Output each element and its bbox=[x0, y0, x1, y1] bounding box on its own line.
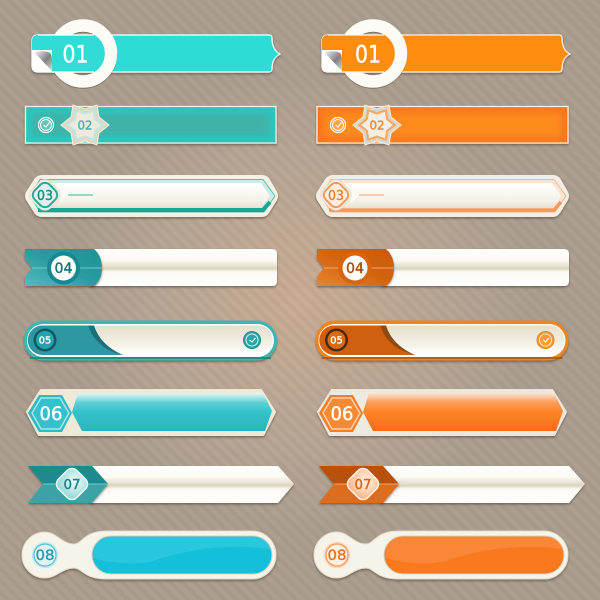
hexagon badge bbox=[319, 395, 363, 432]
icon: clock bbox=[330, 118, 346, 132]
hexagon badge bbox=[28, 395, 72, 432]
number 04: 04 bbox=[346, 261, 364, 277]
panel: teal banner 03 bbox=[25, 175, 278, 217]
panel: orange banner 05 bbox=[316, 320, 568, 360]
star badge bbox=[61, 105, 109, 145]
number 06: 06 bbox=[40, 403, 62, 425]
panel: teal banner 08 bbox=[22, 531, 276, 579]
number 06: 06 bbox=[330, 403, 354, 425]
panel: teal banner 07 bbox=[28, 466, 294, 503]
number 01: 01 bbox=[62, 40, 88, 68]
diamond badge bbox=[27, 177, 63, 213]
diamond badge bbox=[54, 466, 90, 502]
number 03: 03 bbox=[37, 189, 53, 204]
number 04: 04 bbox=[54, 261, 73, 277]
number badge bbox=[32, 542, 58, 568]
number 05: 05 bbox=[39, 336, 51, 346]
panel: orange banner 07 bbox=[319, 466, 585, 503]
panel: teal banner 04 bbox=[25, 249, 277, 286]
number 08: 08 bbox=[328, 548, 346, 564]
number 07: 07 bbox=[354, 478, 372, 493]
panel: teal banner 01 bbox=[32, 26, 280, 82]
number 02: 02 bbox=[78, 118, 92, 132]
diamond badge bbox=[318, 177, 354, 213]
panel: orange banner 08 bbox=[314, 531, 568, 579]
star badge bbox=[353, 105, 401, 145]
number 02: 02 bbox=[370, 118, 384, 132]
panel: orange banner 03 bbox=[316, 175, 569, 217]
icon: clock bbox=[244, 332, 260, 348]
panel: teal banner 02 bbox=[26, 105, 276, 145]
panel: teal banner 06 bbox=[28, 390, 274, 434]
icon: clock bbox=[38, 118, 54, 132]
panel: teal banner 05 bbox=[24, 320, 277, 360]
number badge bbox=[34, 328, 56, 352]
number 05: 05 bbox=[330, 336, 343, 346]
panel: orange banner 01 bbox=[322, 26, 570, 82]
number badge bbox=[325, 328, 348, 352]
number 01: 01 bbox=[355, 40, 381, 68]
panel: orange banner 06 bbox=[318, 390, 566, 434]
number 07: 07 bbox=[64, 478, 80, 493]
number 08: 08 bbox=[36, 548, 54, 564]
number 03: 03 bbox=[328, 189, 344, 204]
icon: clock bbox=[537, 332, 554, 348]
panel: orange banner 04 bbox=[317, 249, 569, 286]
diamond badge bbox=[345, 466, 381, 502]
panel: orange banner 02 bbox=[317, 105, 568, 145]
number badge bbox=[324, 542, 350, 568]
